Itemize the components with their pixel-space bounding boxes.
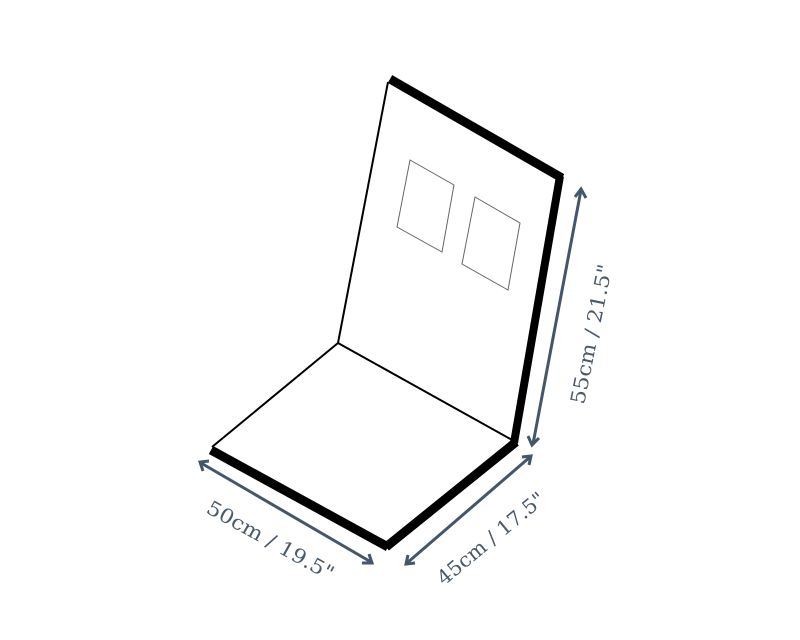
tie panel right (462, 197, 520, 290)
arrow: depth (406, 456, 531, 564)
tie panel left (397, 160, 454, 252)
label: height: 55cm / 21.5" (565, 262, 617, 406)
seat left edge (212, 343, 338, 447)
backrest left edge (338, 82, 388, 343)
seat front thick edge (386, 442, 516, 547)
seat left thick edge (211, 450, 388, 547)
label: depth: 45cm / 17.5" (432, 487, 550, 590)
seat fold line (338, 343, 514, 441)
backrest right thick edge (514, 176, 560, 443)
arrow: width (200, 461, 372, 563)
backrest top thick edge (390, 79, 562, 178)
arrow: height (528, 189, 586, 445)
label: width: 50cm / 19.5" (203, 495, 338, 585)
cushion outline (211, 79, 562, 547)
